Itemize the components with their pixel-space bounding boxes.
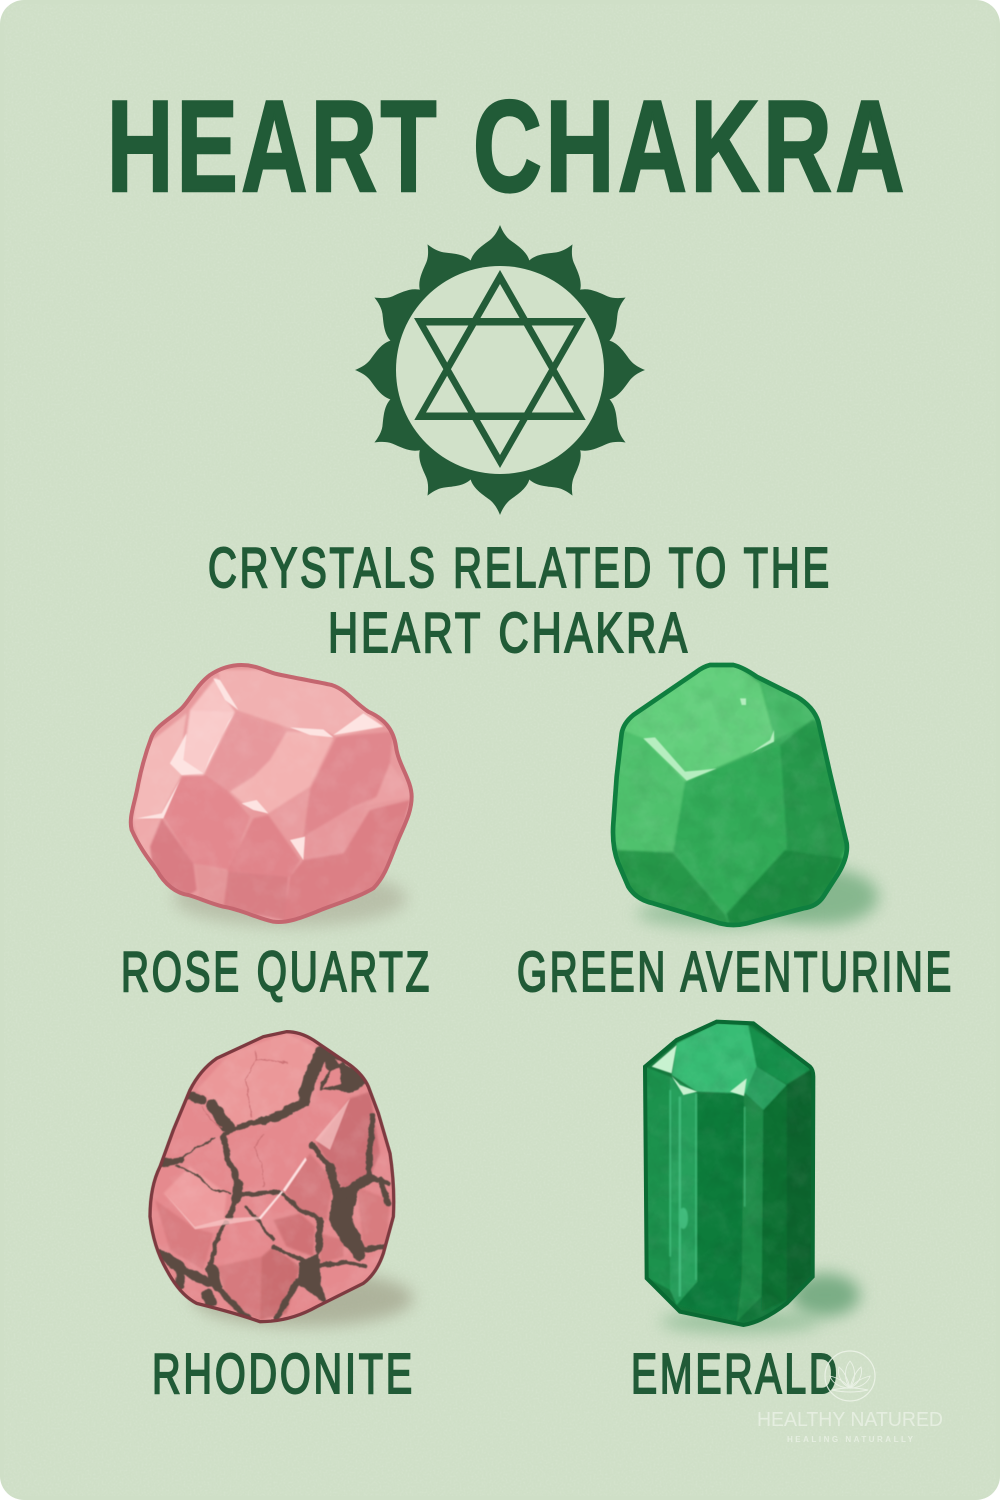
crystal: rose quartz: [123, 660, 417, 927]
icon: heart chakra symbol: [355, 225, 645, 515]
watermark logo: [757, 1351, 943, 1444]
crystal: rhodonite: [143, 1027, 413, 1327]
watermark logo: HEALING NATURALLY: [787, 1435, 914, 1444]
crystal: emerald: [640, 1020, 860, 1333]
title: HEART: [107, 73, 440, 219]
heading: crystals related: HEART CHAKRA: [328, 601, 690, 665]
label: emerald: EMERALD: [631, 1342, 840, 1406]
label: rhodonite: RHODONITE: [152, 1342, 415, 1406]
watermark logo: HEALTHY NATURED: [757, 1409, 943, 1431]
label: rose quartz: ROSE QUARTZ: [121, 940, 432, 1004]
title: [107, 73, 908, 219]
heading: crystals related: [208, 536, 832, 665]
crystal: green aventurine: [603, 660, 878, 930]
